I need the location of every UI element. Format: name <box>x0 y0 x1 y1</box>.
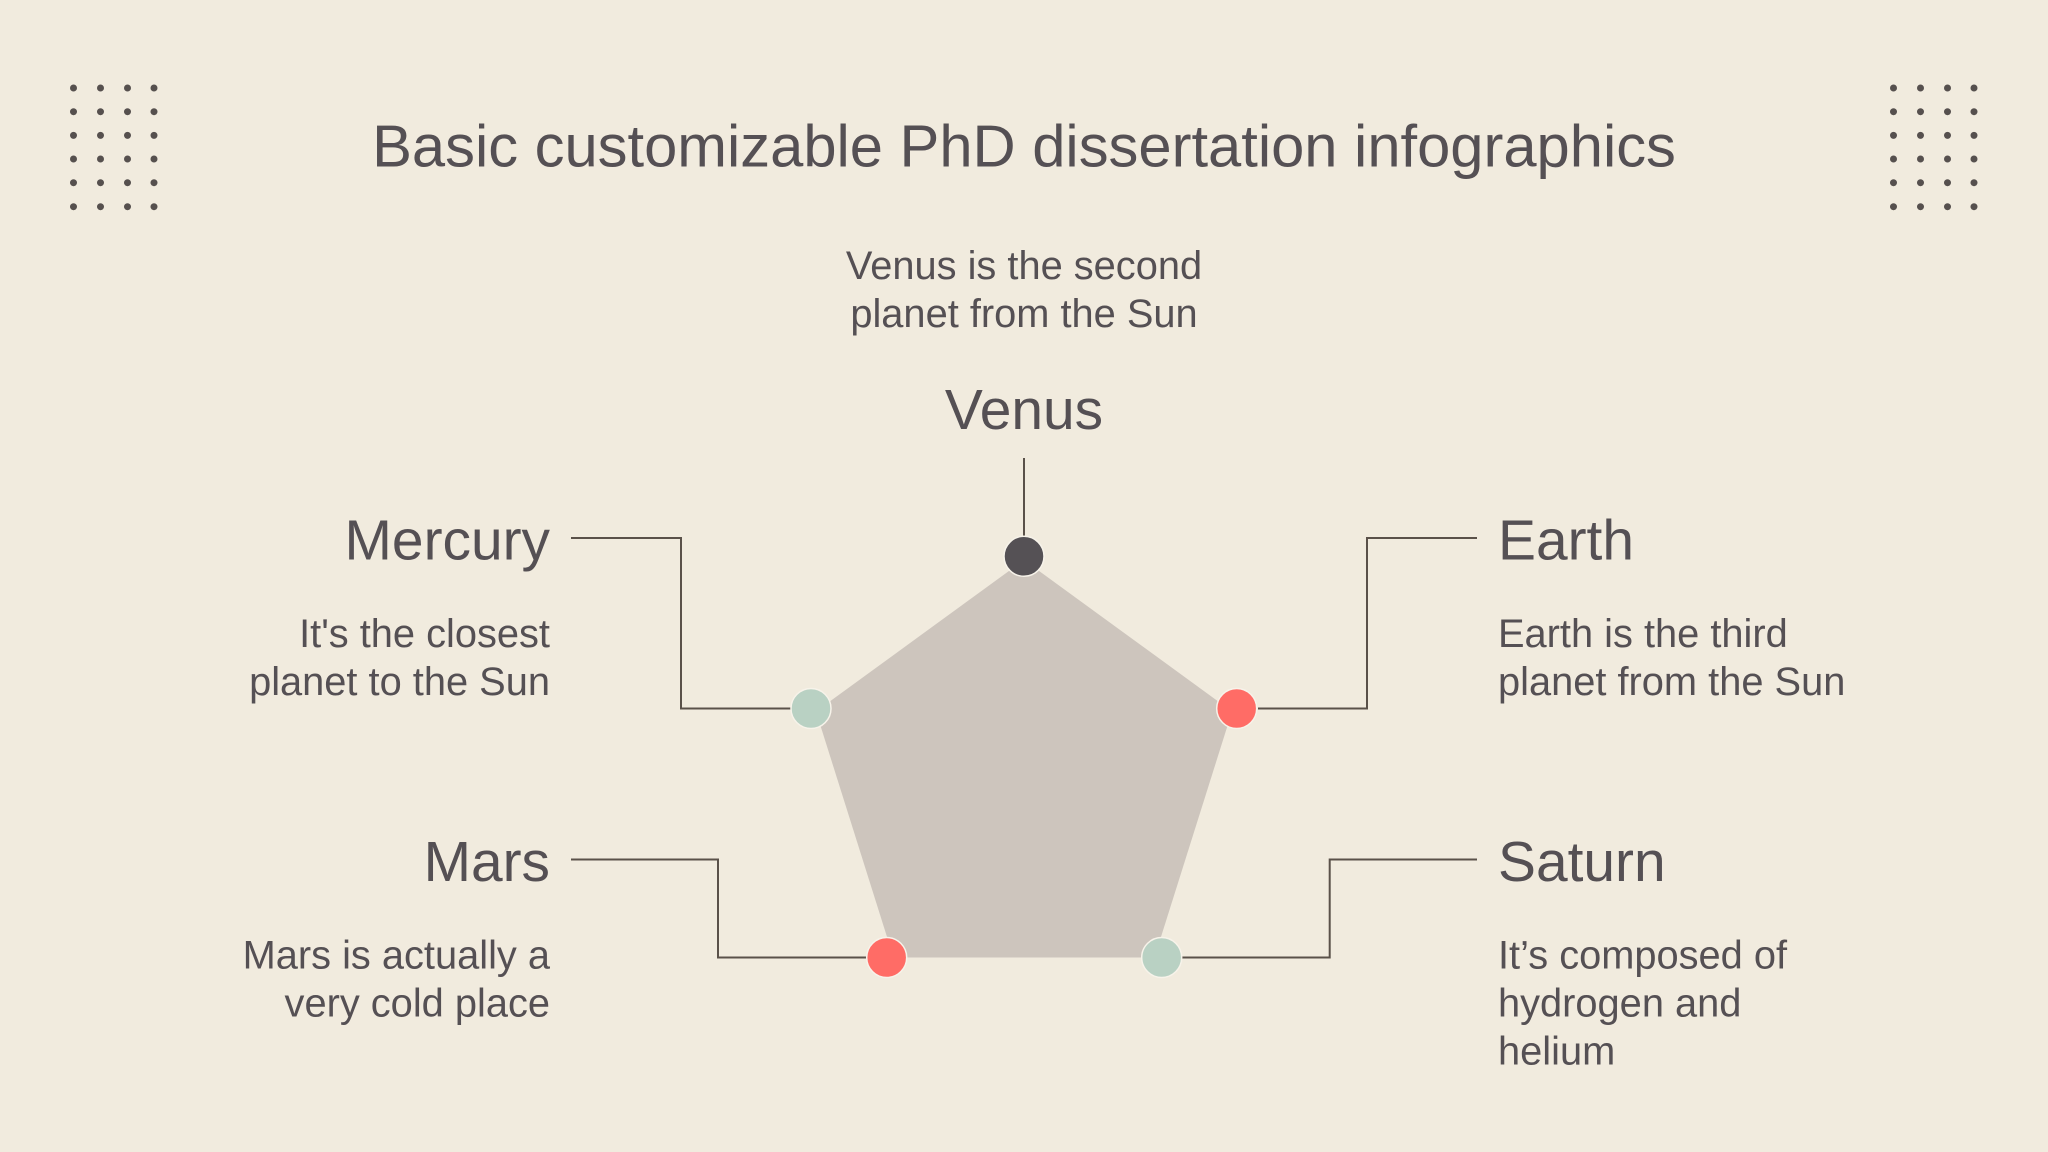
Venus description: planet from the Sun <box>850 292 1198 336</box>
decorative dot grid: top right <box>1890 84 1978 210</box>
pentagon <box>816 560 1232 958</box>
connector: Saturn <box>1182 860 1477 958</box>
Saturn description: It’s composed of <box>1498 934 1788 978</box>
Earth description: planet from the Sun <box>1498 660 1845 704</box>
connector: Earth <box>1258 538 1477 708</box>
Earth heading: Earth <box>1498 508 1634 572</box>
Saturn heading: Saturn <box>1498 830 1666 894</box>
node: Saturn <box>1142 938 1182 978</box>
Mercury description: It's the closest <box>299 612 550 656</box>
Venus heading: Venus <box>945 378 1103 442</box>
node: Venus <box>1004 536 1044 576</box>
Saturn description: helium <box>1498 1030 1615 1074</box>
Venus description: Venus is the second <box>846 244 1202 288</box>
Mars description: very cold place <box>285 982 550 1026</box>
Mercury description: planet to the Sun <box>249 660 550 704</box>
Mars heading: Mars <box>424 830 550 894</box>
Saturn description: hydrogen and <box>1498 982 1741 1026</box>
Earth description: Earth is the third <box>1498 612 1788 656</box>
node: Mercury <box>791 688 831 728</box>
connector: Venus <box>1023 458 1025 536</box>
connector: Mercury <box>571 538 791 708</box>
Mars description: Mars is actually a <box>243 934 551 978</box>
node: Mars <box>867 938 907 978</box>
title: Basic customizable PhD dissertation infographics <box>372 112 1676 180</box>
node: Earth <box>1217 688 1257 728</box>
Mercury heading: Mercury <box>345 508 551 572</box>
connector: Mars <box>571 860 866 958</box>
decorative dot grid: top left <box>70 84 158 210</box>
